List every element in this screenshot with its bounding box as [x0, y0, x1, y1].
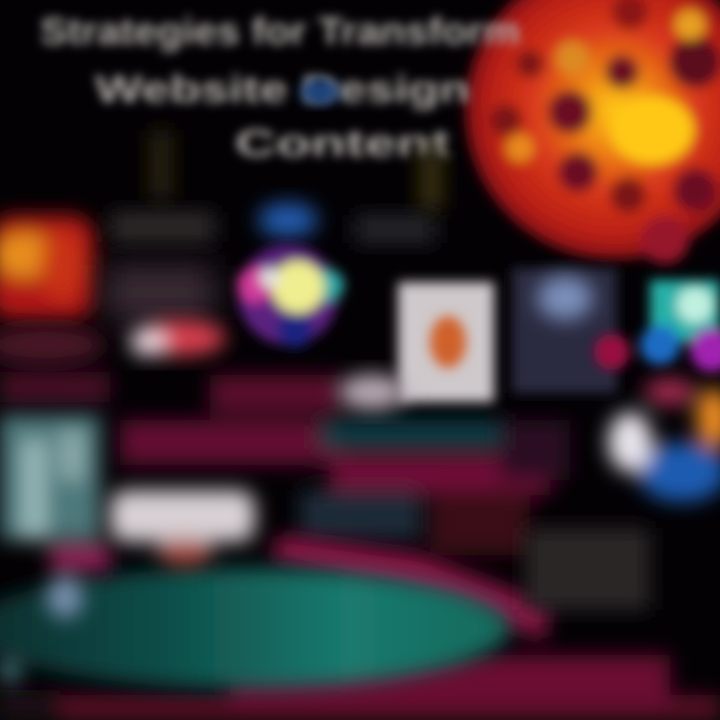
title line 2: Website Design — [95, 69, 470, 111]
colour wheel — [237, 245, 344, 348]
sunburst illustration — [465, 0, 720, 264]
gray label right — [355, 215, 435, 243]
gray label left — [110, 212, 215, 242]
white centre-left shape — [110, 490, 255, 566]
poster centre — [430, 316, 466, 368]
panel highlight — [537, 276, 593, 320]
magenta band — [270, 535, 550, 640]
title line 3: Content — [235, 123, 451, 165]
small white highlight — [338, 374, 406, 410]
left column panel — [0, 325, 110, 684]
faint vertical accents — [150, 130, 442, 210]
left red blob — [0, 215, 95, 320]
title — [40, 11, 520, 165]
gray left panel — [105, 265, 215, 320]
blue label — [258, 202, 318, 238]
dark panel — [512, 268, 617, 393]
teal floor ellipse — [0, 568, 510, 688]
title line 1: Strategies for Transform — [40, 11, 520, 53]
right lower cluster — [608, 378, 720, 502]
gray text block — [525, 528, 650, 610]
floor and lower bands — [0, 372, 720, 720]
pink and white cards — [130, 320, 226, 356]
blue title accent — [300, 80, 340, 104]
right colourful icon — [594, 280, 720, 372]
white poster — [398, 282, 494, 402]
